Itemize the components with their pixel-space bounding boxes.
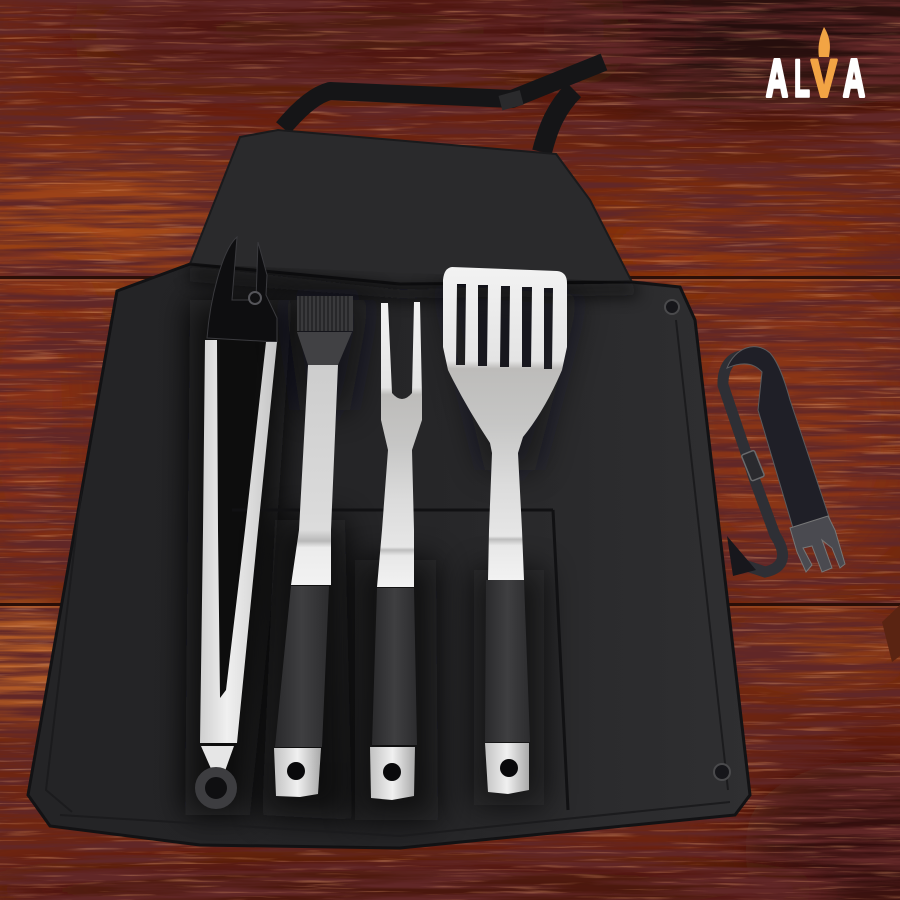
wordmark ALVA: A bbox=[766, 50, 788, 108]
tong steel arms bbox=[200, 340, 277, 743]
apron neck strap bbox=[283, 62, 604, 152]
slotted spatula bbox=[443, 267, 567, 794]
wordmark ALVA bbox=[766, 50, 865, 108]
wordmark ALVA: A bbox=[843, 50, 865, 108]
plastic buckle bbox=[790, 516, 845, 572]
tong heads bbox=[207, 237, 277, 342]
loose strap with buckle bbox=[723, 347, 845, 576]
meat fork bbox=[370, 302, 422, 800]
tongs bbox=[200, 237, 277, 804]
basting brush bbox=[274, 296, 353, 797]
wide webbing bbox=[727, 347, 830, 528]
flame icon bbox=[819, 27, 830, 57]
tong ring bbox=[200, 772, 232, 804]
apron main body bbox=[28, 264, 750, 848]
wordmark ALVA: V bbox=[811, 50, 837, 108]
slider bbox=[741, 450, 765, 481]
tong tip bbox=[201, 746, 234, 771]
tong eyelet bbox=[249, 292, 261, 304]
logo bbox=[766, 27, 865, 108]
apron top bib bbox=[190, 130, 632, 290]
thin strap loop bbox=[723, 356, 783, 572]
apron snap eyelets bbox=[665, 300, 730, 780]
wordmark ALVA: L bbox=[794, 50, 810, 108]
